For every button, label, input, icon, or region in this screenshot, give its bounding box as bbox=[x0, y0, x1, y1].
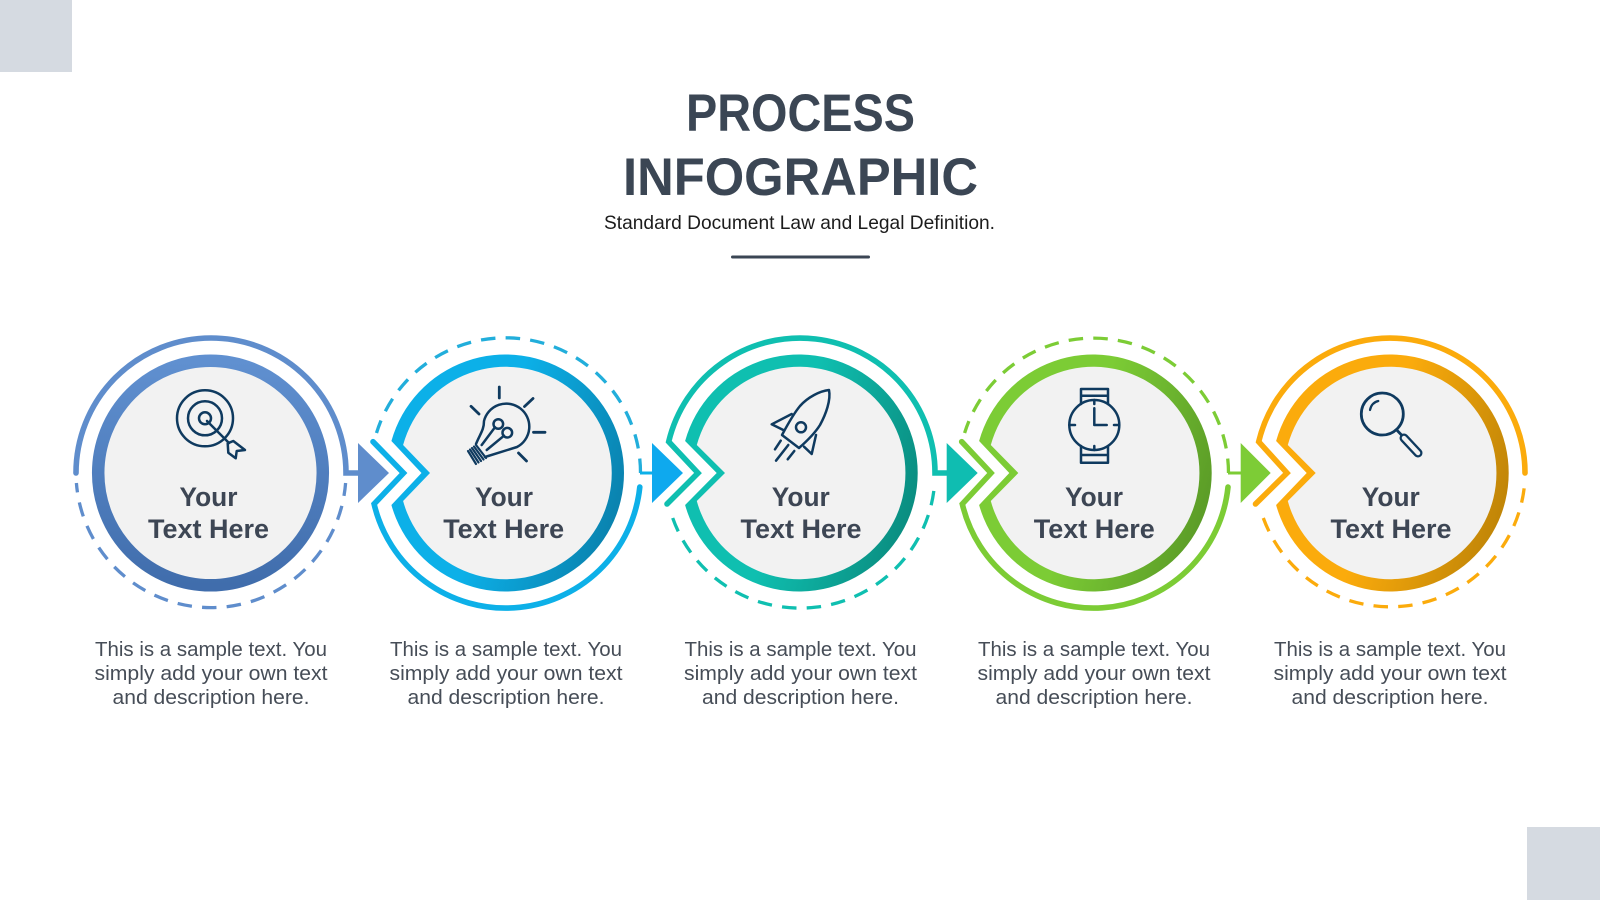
arrow 4 bbox=[1241, 443, 1271, 503]
icon: magnifying glass bbox=[1361, 393, 1418, 453]
description 3: This is a sample text. You bbox=[684, 638, 916, 661]
description 5 bbox=[1274, 638, 1507, 709]
dashed outer arc 2 bbox=[376, 338, 641, 473]
description 1: simply add your own text bbox=[94, 662, 328, 685]
description 3 bbox=[684, 638, 917, 709]
solid outer arc with chevron 2 bbox=[373, 442, 640, 608]
step 5 panel bbox=[1256, 338, 1525, 709]
step 3 panel bbox=[667, 338, 978, 709]
arrow 2 bbox=[652, 443, 683, 503]
icon: wristwatch bbox=[1069, 389, 1119, 463]
arrow 3 bbox=[947, 443, 978, 503]
label 3 bbox=[740, 482, 862, 544]
icon: rocket bbox=[772, 390, 829, 461]
dashed outer arc 5 bbox=[1263, 487, 1524, 607]
description 3: and description here. bbox=[702, 686, 899, 709]
description 4: This is a sample text. You bbox=[978, 638, 1210, 661]
title: INFOGRAPHIC bbox=[623, 148, 978, 207]
label 2: Your bbox=[475, 482, 533, 512]
solid outer arc with chevron 5 bbox=[1256, 338, 1525, 504]
label 2 bbox=[443, 482, 564, 544]
description 2 bbox=[390, 638, 623, 709]
ring 5 bbox=[1276, 354, 1509, 591]
label 3: Text Here bbox=[740, 514, 862, 544]
corner block: bottom right bbox=[1527, 827, 1600, 900]
description 4: and description here. bbox=[996, 686, 1192, 709]
label 5: Your bbox=[1362, 482, 1420, 512]
label 4: Your bbox=[1065, 482, 1123, 512]
subtitle: Standard Document Law and Legal Definition. bbox=[604, 212, 995, 234]
solid outer arc with chevron 3 bbox=[667, 338, 947, 504]
description 2: This is a sample text. You bbox=[390, 638, 622, 661]
title: PROCESS bbox=[686, 84, 915, 143]
step 4 panel bbox=[962, 338, 1271, 709]
dashed outer arc 4 bbox=[965, 338, 1228, 473]
description 4: simply add your own text bbox=[978, 662, 1211, 685]
label 5: Text Here bbox=[1330, 514, 1452, 544]
label 1: Your bbox=[180, 482, 238, 512]
dashed outer arc 3 bbox=[673, 487, 934, 608]
description 5: This is a sample text. You bbox=[1274, 638, 1506, 661]
ring 4 bbox=[979, 354, 1212, 591]
dashed outer arc 1 bbox=[76, 483, 346, 608]
description 2: and description here. bbox=[408, 686, 604, 709]
step 1 panel bbox=[76, 338, 389, 709]
icon: target with arrow bbox=[177, 390, 245, 458]
label 1 bbox=[148, 482, 269, 544]
description 1: and description here. bbox=[112, 686, 310, 709]
corner block: top left bbox=[0, 0, 72, 72]
description 1: This is a sample text. You bbox=[95, 638, 327, 661]
arrow 1 bbox=[358, 443, 389, 503]
label 5 bbox=[1330, 482, 1452, 544]
icon: light bulb bbox=[468, 387, 545, 464]
label 1: Text Here bbox=[148, 514, 269, 544]
title bbox=[623, 84, 978, 207]
label 3: Your bbox=[772, 482, 830, 512]
solid outer arc with chevron 4 bbox=[962, 442, 1228, 608]
elbow connector 4 bbox=[1228, 472, 1242, 474]
label 4 bbox=[1034, 482, 1155, 544]
title divider bbox=[731, 256, 870, 258]
description 4 bbox=[978, 638, 1211, 709]
description 3: simply add your own text bbox=[684, 662, 917, 685]
ring 3 bbox=[685, 354, 918, 591]
solid outer arc and elbow 1 bbox=[76, 338, 359, 473]
label 2: Text Here bbox=[443, 514, 564, 544]
ring 2 bbox=[391, 354, 624, 591]
description 1 bbox=[94, 638, 328, 709]
description 2: simply add your own text bbox=[390, 662, 623, 685]
label 4: Text Here bbox=[1034, 514, 1155, 544]
description 5: and description here. bbox=[1292, 686, 1488, 709]
ring 1 bbox=[98, 361, 323, 585]
description 5: simply add your own text bbox=[1274, 662, 1507, 685]
elbow connector 2 bbox=[640, 472, 653, 474]
step 2 panel bbox=[373, 338, 683, 709]
